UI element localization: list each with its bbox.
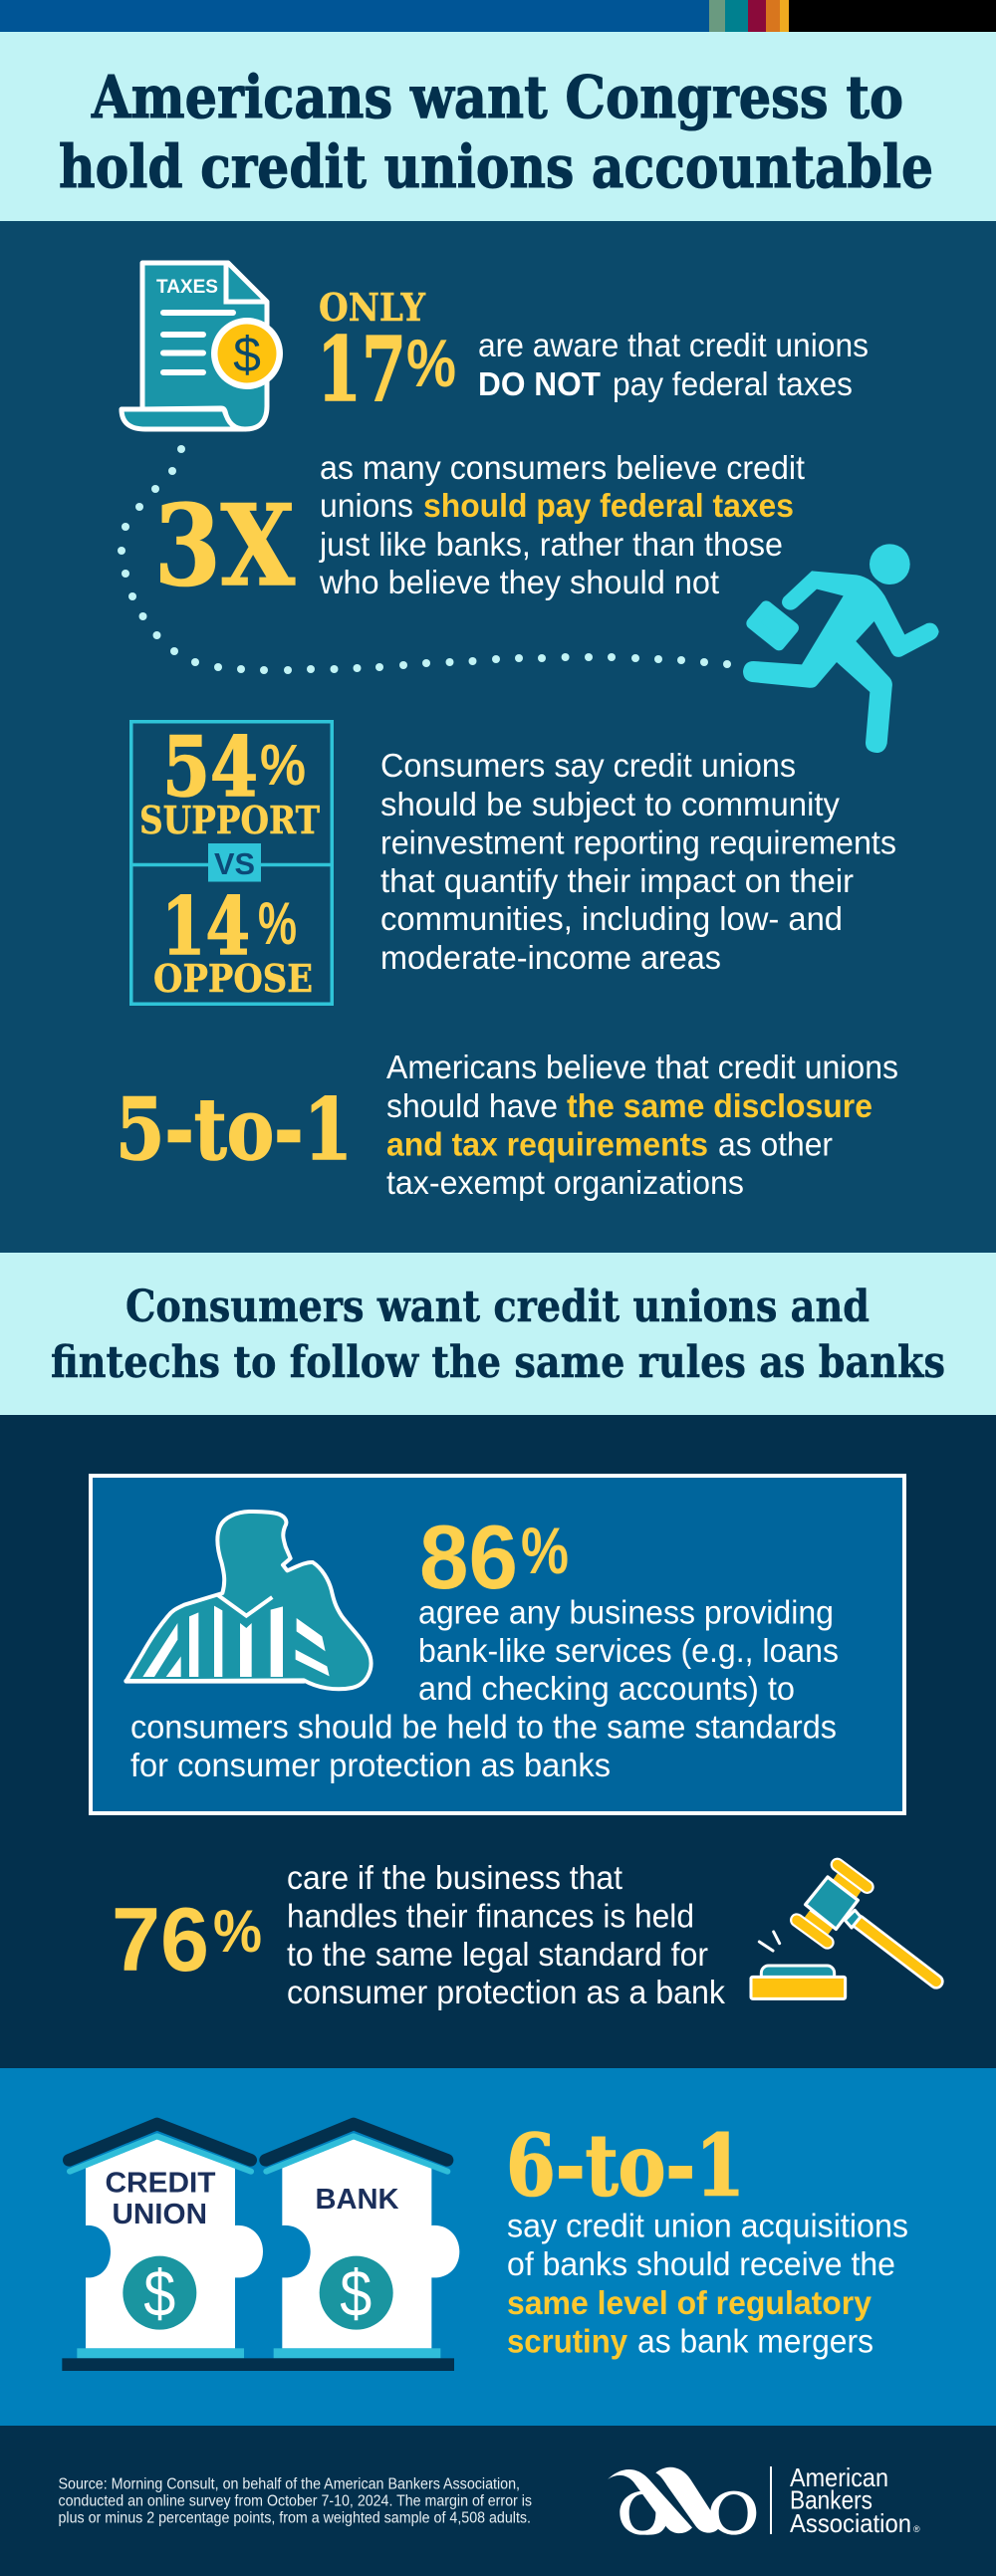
source note: Source: Morning Consult, on behalf of the American Bankers Association, [58,2475,520,2493]
stat: 5-to-1: Americans believe that credit unions [386,1049,898,1085]
panel: consumer protection findings [0,1415,996,2068]
heading [51,1282,945,1388]
stat: 6-to-1: as bank mergers [637,2322,873,2360]
logo: American Bankers Association [608,2462,920,2538]
text: community reinvestment: should be subject to community [380,786,840,822]
stat: 3X [154,449,805,611]
text: community reinvestment: moderate-income areas [380,939,721,976]
icon: credit union and bank puzzle houses: $ [340,2256,372,2330]
stat: 6-to-1: 6-to-1 [506,2117,745,2217]
support versus oppose box: % [260,733,306,798]
icon: credit union and bank puzzle houses: $ [143,2256,175,2330]
dotted path from document to runner [118,445,731,674]
support versus oppose box: SUPPORT [139,798,320,842]
callout: 86%: for consumer protection as banks [130,1747,611,1783]
panel: tax and disclosure findings [0,221,996,1253]
footer [0,2426,996,2576]
text: community reinvestment: Consumers say credit unions [380,747,796,784]
callout: 86%: agree any business providing [418,1593,834,1631]
logo: American Bankers Association: Bankers [790,2485,872,2515]
vs badge: VS [214,846,255,881]
top colour bar [0,0,996,32]
stat: 6-to-1 [506,2117,908,2360]
callout: 86%: bank-like services (e.g., loans [418,1632,839,1669]
title banner [0,32,996,221]
stat: 5-to-1: as other [718,1125,833,1163]
second heading banner [0,1253,996,1415]
logo: American Bankers Association: ® [913,2524,920,2534]
stat: 76%: % [213,1898,262,1965]
stat: 3X: as many consumers believe credit [320,449,805,486]
text: community reinvestment [380,747,896,976]
icon: credit union and bank puzzle houses [62,2124,459,2371]
stat: 3X: who believe they should not [319,564,719,600]
stat: 3X: should pay federal taxes [423,487,794,524]
callout: 86% [91,1476,904,1813]
source note: conducted an online survey from October 7-10, 2024. The margin of error is [58,2493,532,2509]
stat: 3X: just like banks, rather than those [319,526,783,563]
icon: referee with whistle [126,1512,372,1689]
stat: 6-to-1: scrutiny [507,2322,628,2360]
support versus oppose box: % [258,890,297,957]
callout: 86%: 86 [419,1508,518,1608]
stat: 5-to-1: and tax requirements [386,1125,708,1163]
logo: American Bankers Association: Association [790,2508,911,2538]
stat: 5-to-1: the same disclosure [567,1087,872,1124]
stat: 3X: 3X [154,482,296,611]
stat: 76% [112,1859,725,2010]
panel: acquisitions [0,2068,996,2426]
icon: gavel [751,1865,936,1998]
stat: only 17%: ONLY [319,285,426,330]
support versus oppose box: OPPOSE [153,956,313,1001]
stat: 76%: handles their finances is held [287,1898,694,1934]
support versus oppose box: 54 [162,720,258,816]
icon: credit union and bank puzzle houses: CREDIT [106,2167,216,2199]
icon: tax document with coin: $ [233,327,261,382]
support versus oppose box [131,720,332,1004]
icon: credit union and bank puzzle houses: BANK [315,2184,399,2216]
heading: Consumers want credit unions and [125,1282,870,1332]
stat: only 17% [317,285,869,421]
text: community reinvestment: reinvestment reporting requirements [380,824,896,860]
stat: only 17%: DO NOT [478,365,601,402]
stat: 76%: consumer protection as a bank [287,1974,725,2010]
stat: 5-to-1: 5-to-1 [116,1080,353,1180]
stat: 5-to-1 [116,1049,898,1201]
icon: running businessperson with briefcase [743,544,939,753]
callout: 86%: % [521,1514,569,1587]
support versus oppose box: 14 [161,879,250,973]
title [59,63,933,201]
stat: only 17%: are aware that credit unions [478,327,869,363]
stat: 76%: care if the business that [287,1859,622,1896]
stat: 6-to-1: of banks should receive the [507,2245,895,2282]
stat: 6-to-1: same level of regulatory [507,2284,872,2321]
stat: 6-to-1: say credit union acquisitions [507,2207,908,2244]
callout: 86%: and checking accounts) to [418,1670,795,1707]
house: credit union [69,2124,263,2358]
source note [58,2475,532,2527]
stat: 76%: 76 [112,1890,209,1991]
stat: only 17%: pay federal taxes [613,365,853,402]
text: community reinvestment: that quantify their impact on their [380,862,854,899]
stat: 5-to-1: tax-exempt organizations [386,1164,744,1201]
icon: tax document with coin [122,263,283,429]
stat: 5-to-1: should have [386,1087,558,1124]
logo: American Bankers Association: American [790,2462,888,2492]
stat: 3X: unions [320,487,413,524]
house: bank [266,2124,459,2358]
icon: credit union and bank puzzle houses: UNION [112,2199,207,2230]
icon: tax document with coin: TAXES [156,276,218,298]
text: community reinvestment: communities, including low- and [380,900,843,937]
stat: only 17%: 17 [317,317,406,421]
stat: 76%: to the same legal standard for [287,1936,708,1973]
callout: 86%: consumers should be held to the same standards [130,1709,837,1745]
source note: plus or minus 2 percentage points, from a weighted sample of 4,508 adults. [58,2509,531,2527]
stat: only 17%: % [406,326,456,401]
